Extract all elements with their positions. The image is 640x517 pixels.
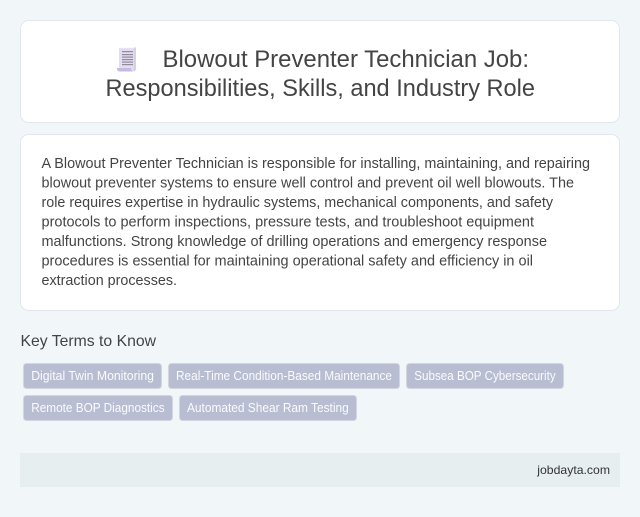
heading: key terms: Key Terms to Know <box>20 333 156 350</box>
tag: automated shear ram testing: Automated Shear Ram Testing <box>187 401 349 415</box>
text block: description: role requires expertise in hydraulic systems, mechanical components, and safety <box>42 195 554 211</box>
title <box>106 46 535 102</box>
tag: remote bop diagnostics: Remote BOP Diagnostics <box>31 401 165 415</box>
icon: receipt scroll <box>117 48 136 72</box>
footer text: jobdayta.com <box>536 463 610 477</box>
tag: real-time condition-based maintenance <box>168 364 400 388</box>
text block: description: blowout preventer systems to ensure well control and prevent oil well blowouts. The <box>42 176 574 192</box>
text block: description <box>42 156 590 289</box>
panel: description <box>20 134 620 310</box>
text block: description: procedures is essential for maintaining operational safety and efficiency in oil <box>42 254 533 270</box>
title: Responsibilities, Skills, and Industry Role <box>106 75 535 102</box>
footer <box>20 453 620 487</box>
text block: description: malfunctions. Strong knowledge of drilling operations and emergency response <box>42 234 547 250</box>
tag list: key terms <box>24 364 564 420</box>
tag: real-time condition-based maintenance: Real-Time Condition-Based Maintenance <box>176 369 392 383</box>
text block: description: protocols to perform inspections, pressure tests, and troubleshoot equipment <box>42 214 534 230</box>
text block: description: A Blowout Preventer Technician is responsible for installing, maintaining, and repairing <box>42 156 590 172</box>
tag: remote bop diagnostics <box>24 396 172 420</box>
tag: automated shear ram testing <box>180 396 356 420</box>
text block: description: extraction processes. <box>42 273 177 289</box>
panel: title card <box>20 20 620 122</box>
tag: subsea bop cybersecurity <box>406 364 564 388</box>
tag: digital twin monitoring <box>24 364 162 388</box>
tag: digital twin monitoring: Digital Twin Monitoring <box>31 369 154 383</box>
tag: subsea bop cybersecurity: Subsea BOP Cybersecurity <box>414 369 556 383</box>
title: Blowout Preventer Technician Job: <box>162 46 529 73</box>
